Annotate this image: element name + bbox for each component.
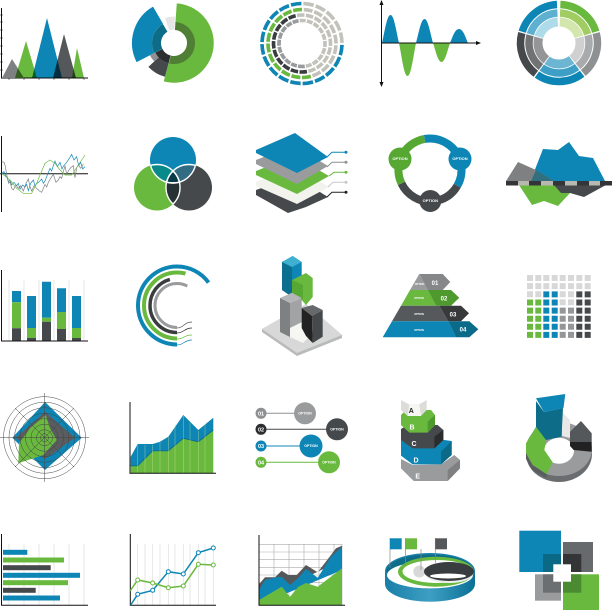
- icon: stacked layers: [256, 133, 348, 213]
- icon: hexagonal stack A to E: [401, 400, 460, 481]
- icon: three option ring: OPTION: [392, 156, 408, 161]
- icon: iceberg chart: [506, 142, 612, 206]
- icon: radial arc chart: [138, 266, 216, 345]
- icon: numbered option list: OPTION: [322, 460, 336, 464]
- icon: pyramid steps: OPTION: [415, 283, 424, 286]
- icon: stacked area chart with grid: [259, 535, 345, 605]
- icon: triangle area chart: [0, 8, 88, 80]
- icon: venn diagram: [134, 137, 212, 210]
- icon: numbered option list: OPTION: [298, 411, 312, 415]
- icon: 3D donut chart: [526, 394, 592, 482]
- icon: pyramid steps: OPTION: [414, 329, 424, 332]
- icon: numbered option list: [256, 402, 348, 473]
- icon: numbered option list: 02: [258, 427, 264, 433]
- icon: square matrix: [530, 275, 588, 338]
- icon: multi-level sunburst: [505, 0, 612, 97]
- icon: segmented concentric rings: [260, 2, 344, 85]
- icon: isometric blocks: [262, 256, 342, 356]
- icon: hexagonal stack A to E: A: [409, 408, 414, 415]
- icon: 3D ring with flags: [385, 538, 475, 602]
- icon: radar chart: [0, 393, 89, 482]
- icon: stacked bar chart: [2, 270, 88, 341]
- icon: pyramid steps: OPTION: [414, 313, 424, 316]
- icon: wave chart: [380, 0, 481, 87]
- icon: two series line chart: [130, 534, 216, 605]
- icon: pyramid steps: 02: [441, 296, 448, 302]
- icon: three option ring: OPTION: [452, 156, 468, 161]
- icon: pyramid steps: 04: [460, 328, 467, 334]
- icon: pyramid steps: [383, 274, 478, 337]
- icon: pyramid steps: OPTION: [414, 297, 424, 300]
- icon: pyramid steps: 01: [432, 281, 439, 287]
- icon: three option ring: OPTION: [423, 198, 438, 203]
- icon: numbered option list: 01: [258, 411, 264, 417]
- icon: horizontal bar chart: [2, 534, 88, 605]
- icon: exploded donut chart: [131, 0, 217, 86]
- icon: numbered option list: OPTION: [304, 444, 318, 448]
- icon: numbered option list: 04: [258, 460, 265, 466]
- icon: overlapping squares: [519, 531, 599, 610]
- icon: hexagonal stack A to E: C: [411, 441, 417, 448]
- icon: noisy line chart: [0, 136, 88, 212]
- icon: numbered option list: 03: [258, 444, 264, 450]
- icon: three option ring: [387, 127, 473, 213]
- icon: hexagonal stack A to E: D: [413, 458, 419, 464]
- icon: pyramid steps: 03: [450, 312, 457, 318]
- icon: hexagonal stack A to E: B: [409, 424, 415, 432]
- icon: area chart with lines: [130, 402, 216, 473]
- icon: numbered option list: OPTION: [330, 427, 344, 431]
- icon: hexagonal stack A to E: E: [415, 474, 420, 480]
